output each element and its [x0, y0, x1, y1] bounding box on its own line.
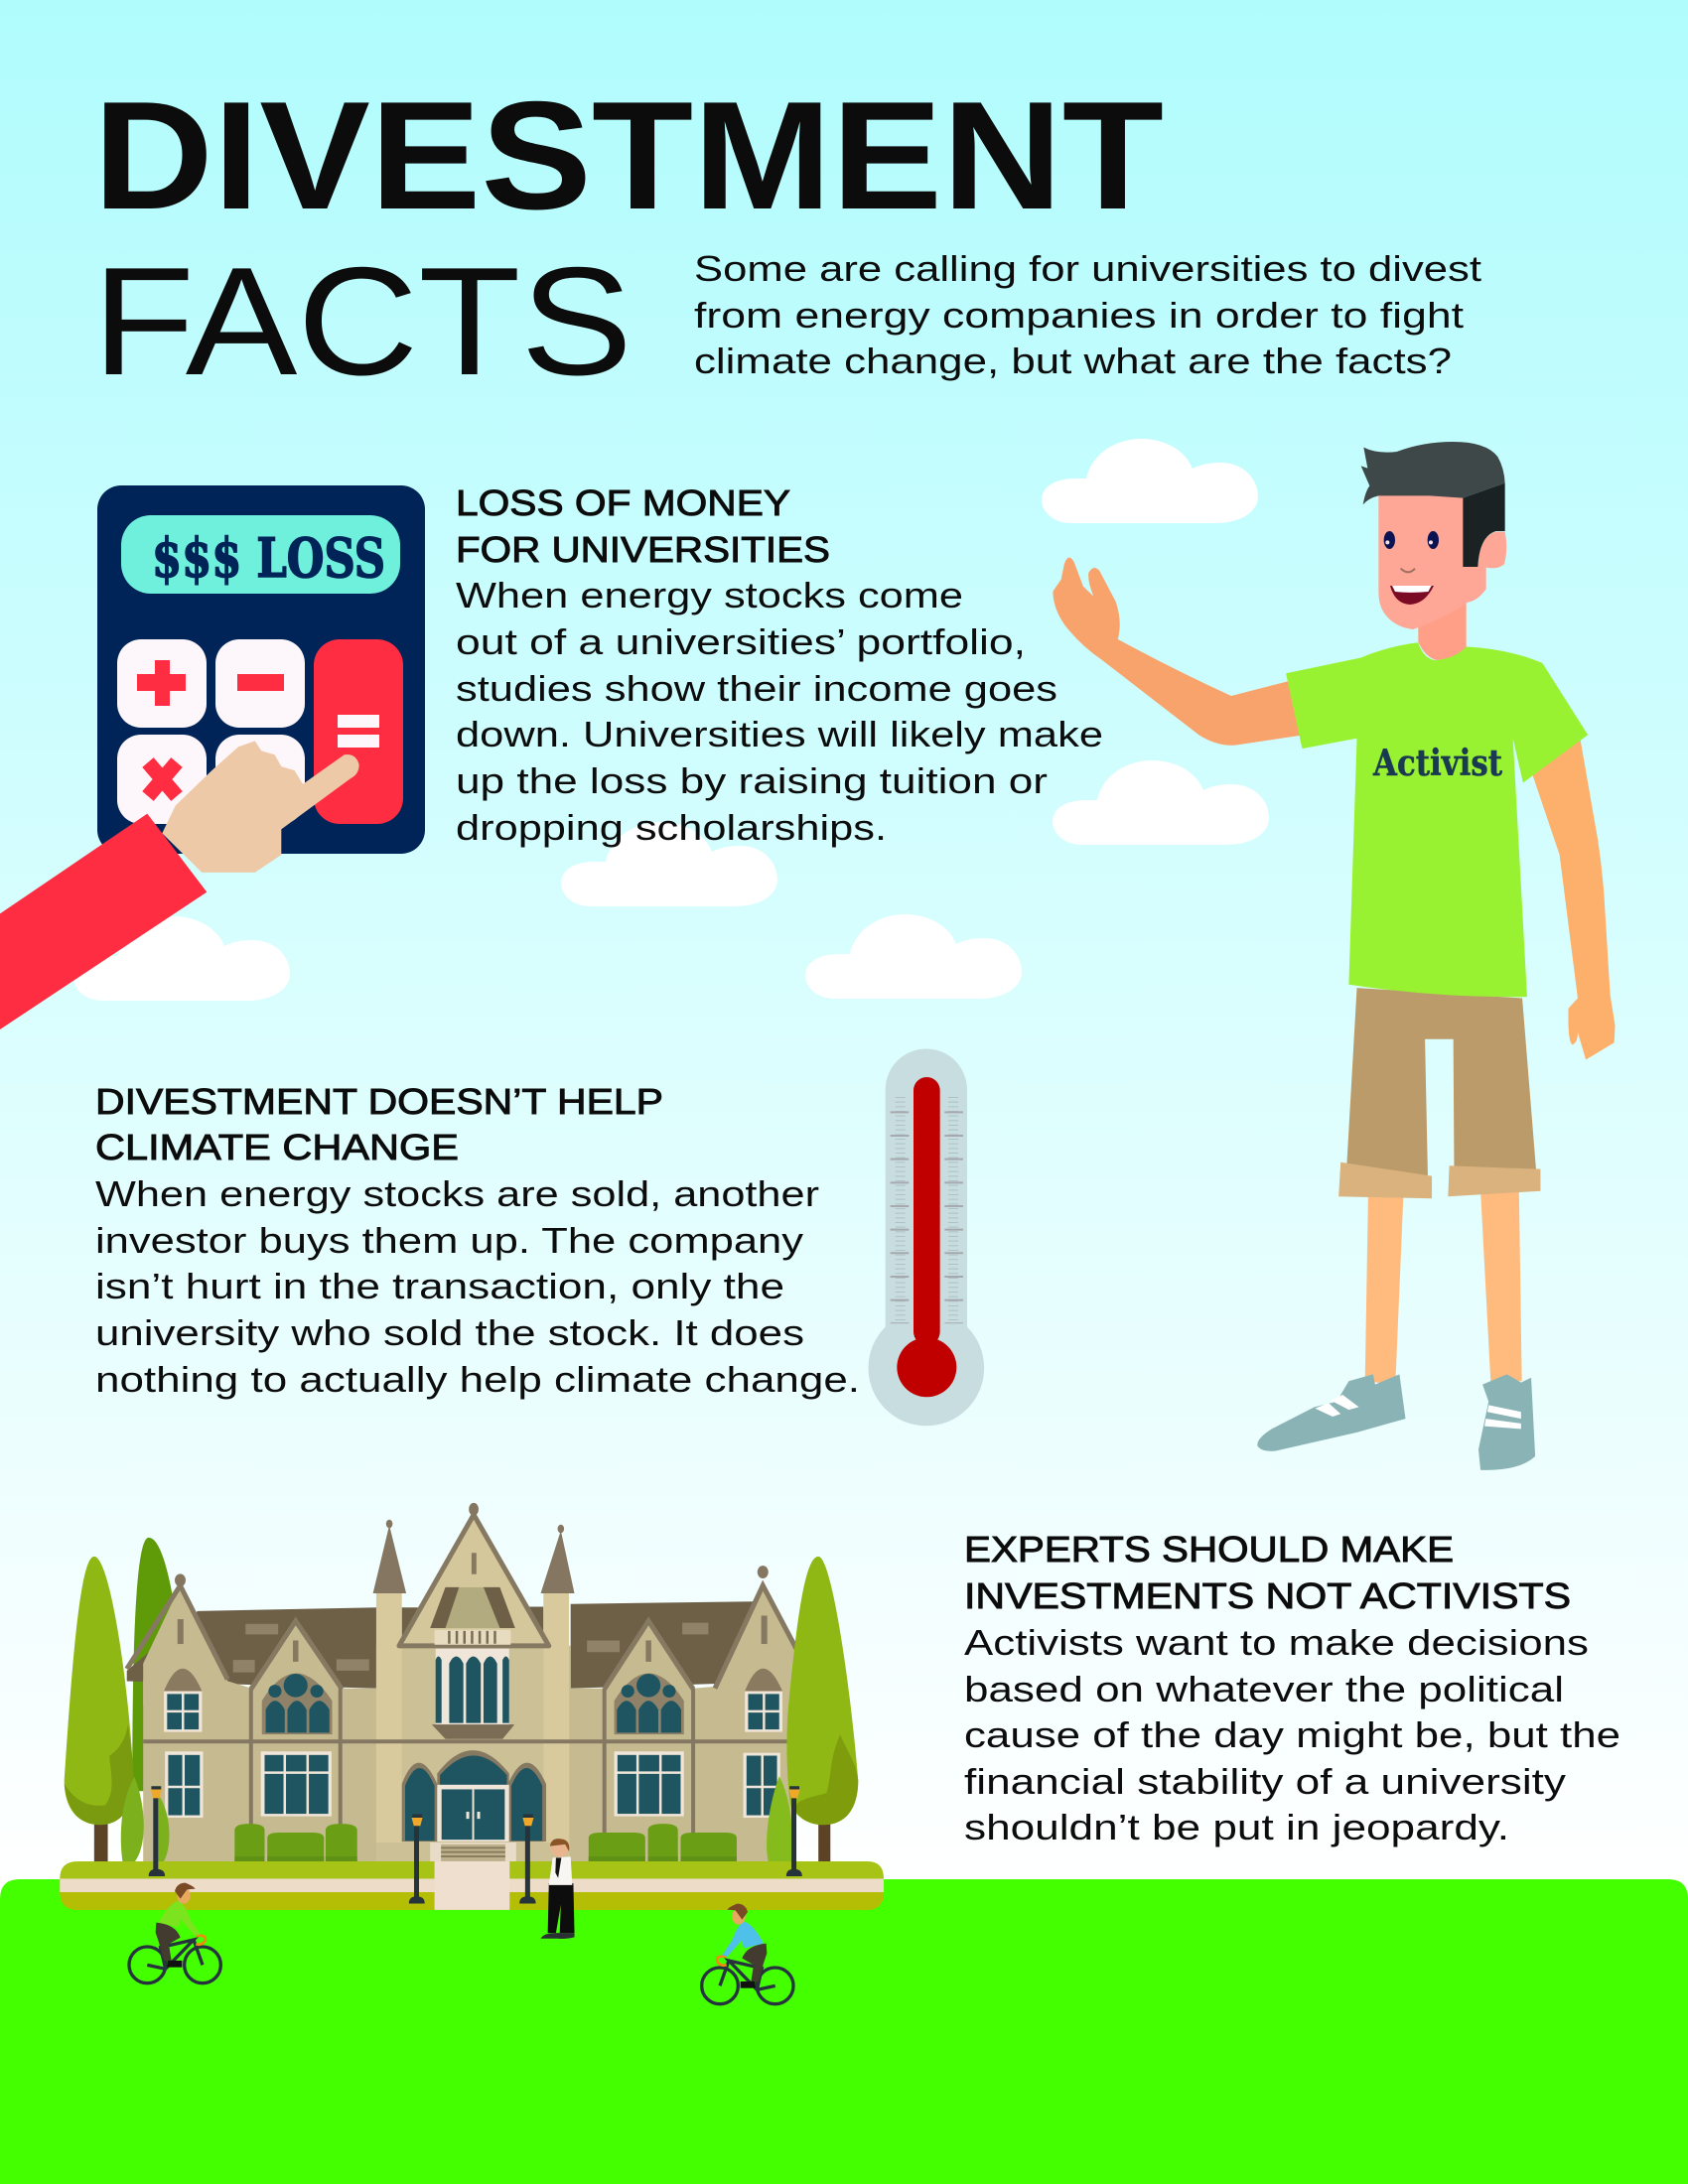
title: FACTS: [92, 235, 633, 407]
calculator display: [121, 515, 400, 594]
heading and text: loss of money: studies show their income goes: [456, 668, 1057, 709]
icon: thermometer: [868, 1048, 984, 1426]
neck and head: [1361, 442, 1506, 660]
intro text: climate change, but what are the facts?: [694, 341, 1452, 381]
heading and text: climate change: DIVESTMENT DOESN’T HELP: [95, 1081, 663, 1122]
heading and text: experts: cause of the day might be, but the: [964, 1714, 1620, 1755]
title: DIVESTMENT: [93, 69, 1164, 241]
heading and text: climate change: nothing to actually help climate change.: [95, 1359, 860, 1400]
back tree: [132, 1538, 182, 1791]
grass ground: [0, 1879, 1688, 2184]
standing man: [541, 1839, 575, 1939]
centre bay: [376, 1646, 570, 1861]
icon: calculator: [97, 485, 425, 854]
heading and text: experts: based on whatever the political: [964, 1669, 1564, 1709]
left tall tree: [65, 1557, 170, 1862]
heading and text: loss of money: up the loss by raising tuition or: [456, 760, 1048, 801]
raised arm: [1053, 558, 1304, 746]
lowered arm: [1527, 725, 1616, 1059]
shirt label: Activist: [1372, 743, 1502, 784]
intro text: Some are calling for universities to divest: [694, 248, 1481, 289]
street lamps: [149, 1786, 802, 1903]
central window: [432, 1649, 514, 1739]
tracery windows: [262, 1674, 684, 1734]
clouds: [73, 439, 1269, 1001]
bushes: [234, 1824, 737, 1861]
building roof: [127, 1601, 796, 1689]
heading and text: loss of money: When energy stocks come: [456, 575, 963, 615]
heading and text: climate change: CLIMATE CHANGE: [95, 1127, 459, 1167]
building walls: [143, 1646, 794, 1861]
icon: hand pressing button: [0, 741, 359, 1029]
calculator buttons: [117, 639, 403, 824]
shorts cuffs: [1338, 1162, 1540, 1198]
right gables: [605, 1566, 796, 1706]
intro text: [694, 248, 1481, 381]
heading and text: experts: EXPERTS SHOULD MAKE: [964, 1529, 1454, 1570]
entrance: [402, 1750, 546, 1861]
heading and text: loss of money: LOSS OF MONEY: [456, 482, 790, 523]
t-shirt: [1286, 642, 1588, 997]
heading and text: loss of money: down. Universities will likely make: [456, 714, 1103, 754]
intro text: from energy companies in order to fight: [694, 295, 1464, 336]
heading and text: loss of money: out of a universities’ portfolio,: [456, 621, 1026, 662]
heading and text: experts: shouldn’t be put in jeopardy.: [964, 1807, 1509, 1847]
heading and text: loss of money: dropping scholarships.: [456, 807, 887, 848]
roof tiles: [233, 1623, 708, 1673]
central gable: [399, 1503, 549, 1646]
legs: [1365, 1189, 1522, 1385]
left gables: [127, 1573, 342, 1706]
heading and text: experts: [964, 1529, 1620, 1847]
heading and text: experts: INVESTMENTS NOT ACTIVISTS: [964, 1575, 1571, 1616]
left towers: [373, 1520, 575, 1843]
heading and text: climate change: isn’t hurt in the transaction, only the: [95, 1266, 784, 1306]
heading and text: loss of money: FOR UNIVERSITIES: [456, 529, 830, 570]
right shoe: [1478, 1374, 1535, 1470]
building trim: [143, 1689, 794, 1844]
cyclist green: [129, 1883, 220, 1983]
heading and text: loss of money: [456, 482, 1103, 848]
heading and text: experts: Activists want to make decisions: [964, 1622, 1589, 1663]
university scene: [60, 1503, 884, 1939]
heading and text: climate change: university who sold the stock. It does: [95, 1312, 804, 1353]
heading and text: experts: financial stability of a university: [964, 1761, 1566, 1802]
cyclist blue: [702, 1904, 793, 2004]
lower windows: [165, 1751, 780, 1818]
heading and text: climate change: investor buys them up. The company: [95, 1220, 803, 1261]
heading and text: climate change: [95, 1081, 860, 1400]
calculator display: $$$ LOSS: [152, 526, 385, 590]
activist figure: [1053, 442, 1616, 1470]
shorts: [1346, 988, 1536, 1176]
left shoe: [1257, 1374, 1406, 1451]
lawn and walkway: [60, 1861, 884, 1910]
right tall tree: [767, 1557, 858, 1862]
upper side windows: [164, 1669, 782, 1732]
title: [92, 69, 1164, 407]
heading and text: climate change: When energy stocks are sold, another: [95, 1173, 819, 1214]
